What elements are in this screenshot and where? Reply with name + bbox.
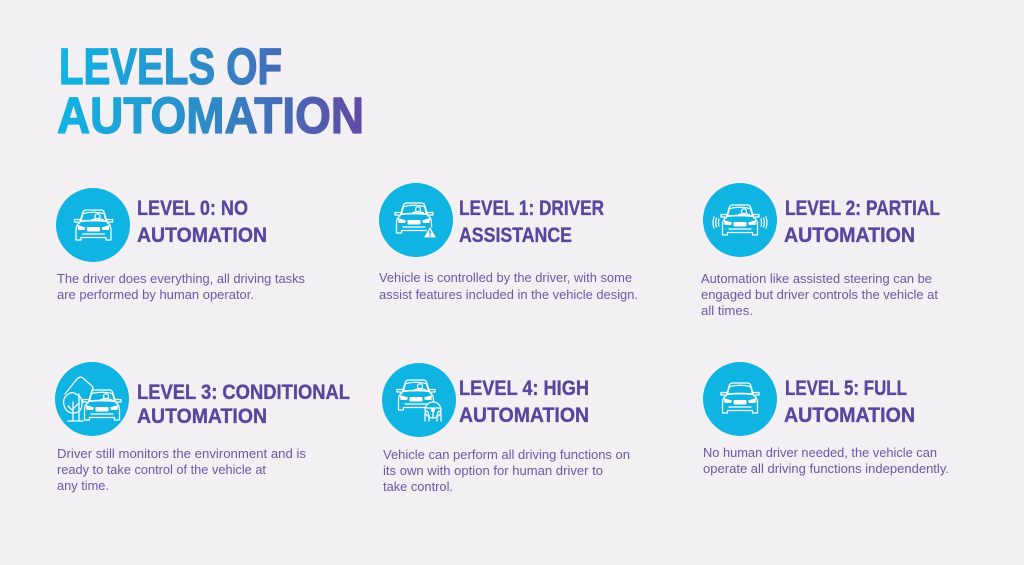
description: level 4 xyxy=(383,448,630,494)
icon: driverless car xyxy=(703,362,777,436)
icon: car with driver xyxy=(56,188,130,262)
title: LEVELS OF xyxy=(59,38,282,95)
description: level 4: take control. xyxy=(383,480,453,494)
panel: level 3 xyxy=(55,362,350,493)
icon: car with steering wheel and hands xyxy=(382,363,456,437)
heading: level 5: LEVEL 5: FULL xyxy=(785,377,907,400)
description: level 2 xyxy=(701,272,939,318)
description: level 4: Vehicle can perform all driving functions on xyxy=(383,448,630,462)
description: level 5: operate all driving functions independently. xyxy=(703,462,949,476)
description: level 3: any time. xyxy=(57,479,109,493)
panel: level 0 xyxy=(56,188,305,302)
heading: level 0 xyxy=(137,197,267,247)
heading: level 3: AUTOMATION xyxy=(137,405,267,428)
description: level 3 xyxy=(57,447,306,493)
description: level 1: Vehicle is controlled by the driver, with some xyxy=(379,271,632,285)
heading: level 5: AUTOMATION xyxy=(784,404,915,427)
panel: level 5 xyxy=(703,362,949,476)
heading: level 3 xyxy=(137,381,350,428)
heading: level 4: LEVEL 4: HIGH xyxy=(459,377,589,400)
icon: car with trees xyxy=(55,362,129,436)
heading: level 2: AUTOMATION xyxy=(784,224,915,247)
icon: car with sensor waves xyxy=(703,183,777,257)
description: level 1: assist features included in the vehicle design. xyxy=(379,288,638,302)
description: level 3: ready to take control of the vehicle at xyxy=(57,463,267,477)
panel: level 2 xyxy=(701,183,940,318)
description: level 5 xyxy=(703,446,949,476)
heading: level 4 xyxy=(459,377,589,427)
heading: level 0: AUTOMATION xyxy=(137,224,267,247)
heading: level 4: AUTOMATION xyxy=(459,404,589,427)
title: AUTOMATION xyxy=(57,87,364,144)
heading: level 1 xyxy=(459,197,604,247)
description: level 3: Driver still monitors the environment and is xyxy=(57,447,306,461)
heading: level 5 xyxy=(784,377,915,427)
description: level 5: No human driver needed, the vehicle can xyxy=(703,446,937,460)
heading: level 1: ASSISTANCE xyxy=(459,224,572,247)
description: level 1 xyxy=(379,271,638,302)
description: level 2: all times. xyxy=(701,304,753,318)
heading: level 3: LEVEL 3: CONDITIONAL xyxy=(137,381,350,404)
description: level 0: are performed by human operator. xyxy=(57,288,254,302)
heading: level 2: LEVEL 2: PARTIAL xyxy=(785,197,940,220)
description: level 0: The driver does everything, all driving tasks xyxy=(57,272,305,286)
heading: level 0: LEVEL 0: NO xyxy=(137,197,248,220)
description: level 2: engaged but driver controls the vehicle at xyxy=(701,288,939,302)
icon: car with warning triangle xyxy=(379,183,453,257)
panel: level 4 xyxy=(382,363,630,494)
description: level 4: its own with option for human driver to xyxy=(383,464,603,478)
title xyxy=(57,38,364,144)
panel: level 1 xyxy=(379,183,638,302)
description: level 0 xyxy=(57,272,305,302)
heading: level 1: LEVEL 1: DRIVER xyxy=(459,197,604,220)
heading: level 2 xyxy=(784,197,940,247)
description: level 2: Automation like assisted steering can be xyxy=(701,272,932,286)
